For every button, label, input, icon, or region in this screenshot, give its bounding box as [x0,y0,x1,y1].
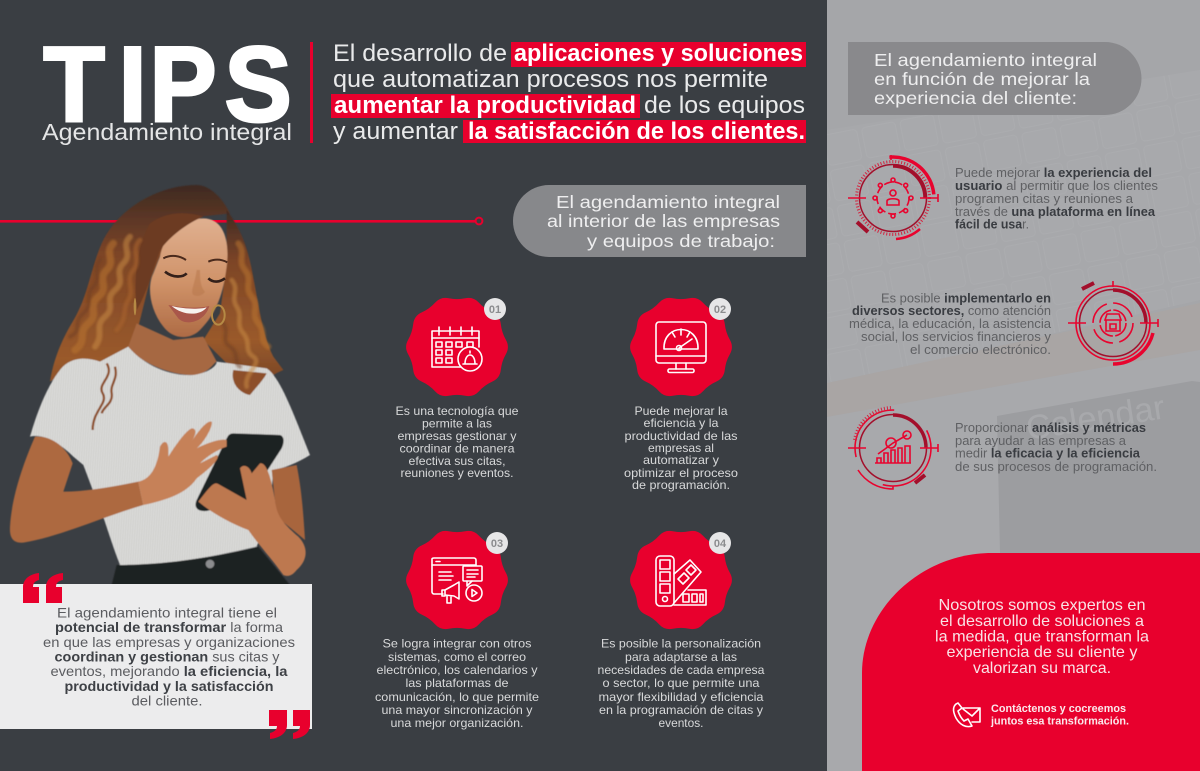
heading statement: aumentar la productividad [334,92,636,119]
description: Es una tecnología que [396,404,519,418]
icon: opening quotes [23,573,63,603]
description: productividad de las [624,429,738,443]
pill heading: inside companies: y equipos de trabajo: [587,231,775,251]
description: automatizar y [643,453,719,467]
quote text: productividad y la satisfacción [64,678,274,694]
icon: target with user network [848,155,938,239]
photo: woman looking at a phone [10,185,310,585]
description: permite a las [422,416,492,430]
text: Nosotros somos expertos en [938,597,1146,614]
text [955,421,1157,474]
badge [486,532,508,554]
text: usuario al permitir que los clientes [955,179,1158,193]
description: las plataformas de [406,676,509,690]
pill heading: customer experience: El agendamiento integral [874,50,1097,70]
quote text: del cliente. [132,692,202,708]
pill heading: inside companies: al interior de las empresas [547,211,780,231]
text: experiencia de su cliente y [946,644,1138,661]
description: optimizar el proceso [624,466,738,480]
text [955,166,1158,232]
text: Proporcionar análisis y métricas [955,421,1146,435]
text: social, los servicios financieros y [861,330,1052,344]
item 03 [375,531,539,730]
badge [709,532,731,554]
description [598,636,765,730]
description: efectiva sus citas, [408,454,506,468]
panel: right grey photo background [827,0,1200,771]
item 04 [598,531,765,730]
description [624,404,738,492]
description: de programación. [632,478,730,492]
badge: 02 [714,304,726,316]
description: empresas gestionar y [398,429,516,443]
pill heading: inside companies: El agendamiento integral [556,192,780,212]
heading statement: la satisfacción de los clientes. [468,118,805,145]
title: TIPS: TIPS [43,25,292,145]
text: la medida, que transforman la [935,628,1149,646]
subtitle: Agendamiento integral [42,119,292,145]
text: el comercio electrónico. [910,343,1051,357]
badge [484,298,506,320]
text [849,292,1052,357]
description: coordinar de manera [400,442,515,456]
icon: monitor with gauge [630,298,732,396]
description: eventos. [658,716,704,730]
icon: phone and envelope [954,703,980,727]
connector line with end node [0,218,482,224]
contact text [990,703,1129,728]
hair curls [70,237,268,387]
text: Puede mejorar la experiencia del [955,166,1152,180]
description: empresas al [648,441,714,455]
icon: closing quotes [269,710,310,739]
pill heading: customer experience: experiencia del cliente: [874,88,1077,108]
badge [709,298,731,320]
item 01 [396,298,519,480]
text: de sus procesos de programación. [955,460,1157,474]
quote text: eventos, mejorando la eficiencia, la [50,663,288,679]
panel: call to action [862,553,1200,771]
description: para adaptarse a las [625,650,737,664]
item 02 [624,298,738,492]
description: eficiencia y la [644,416,719,430]
icon: target with store [1068,281,1158,364]
quote panel [0,573,312,739]
icon: target with growth chart [848,408,938,489]
text: través de una plataforma en línea [955,205,1156,219]
icon: browser, megaphone and play [406,531,508,629]
heading statement: El desarrollo de [333,40,507,67]
description: necesidades de cada empresa [598,663,765,677]
icon: calendar with bell [406,298,508,396]
contact text: Contáctenos y cocreemos [991,703,1126,715]
text: el desarrollo de soluciones a [940,613,1144,630]
description: en la programación de citas y [599,703,763,717]
badge: 01 [489,304,501,316]
quote text: coordinan y gestionan sus citas y [54,648,280,664]
quote text: potencial de transformar la forma [55,619,283,635]
heading statement: y aumentar [333,118,458,145]
icon: colour swatches [630,531,732,629]
pill heading: customer experience [848,42,1141,115]
description: sistemas, como el correo [388,650,526,664]
description: reuniones y eventos. [400,466,514,480]
quote text: en que las empresas y organizaciones [43,634,295,650]
text: para ayudar a las empresas a [955,434,1126,448]
text: Es posible implementarlo en [881,292,1051,306]
panel: right grey photo background: Calendar [1023,388,1168,448]
benefit 1 [848,155,1158,239]
text: fácil de usar. [955,218,1029,232]
description: Se logra integrar con otros [382,636,532,650]
text: programen citas y reuniones a [955,192,1133,206]
heading statement: que automatizan procesos nos permite [333,66,768,93]
description [375,636,539,730]
divider bar [310,42,313,143]
badge: 04 [714,538,727,550]
badge: 03 [491,538,503,550]
quote text: El agendamiento integral tiene el [57,604,277,620]
description: electrónico, los calendarios y [376,663,538,677]
contact text: juntos esa transformación. [990,716,1129,728]
text: diversos sectores, como atención [852,304,1051,318]
text: valorizan su marca. [973,660,1111,677]
text: médica, la educación, la asistencia [849,317,1051,331]
pill heading: customer experience: en función de mejorar la [874,69,1090,89]
pill heading: inside companies [513,185,806,257]
description: comunicación, lo que permite [375,690,539,704]
quote text [43,604,295,708]
description: mayor flexibilidad y eficiencia [598,690,764,704]
description: Puede mejorar la [634,404,728,418]
description [396,404,519,480]
description: una mayor sincronización y [382,703,532,717]
description: o sector, lo que permite una [602,676,760,690]
description: una mejor organización. [390,716,524,730]
heading statement: aplicaciones y soluciones [514,40,803,67]
heading statement [331,40,806,145]
description: Es posible la personalización [601,636,761,650]
benefit 2 [849,281,1158,364]
heading statement: de los equipos [644,92,805,119]
benefit 3 [848,408,1157,489]
text [935,597,1149,677]
text: medir la eficacia y la eficiencia [955,446,1141,460]
